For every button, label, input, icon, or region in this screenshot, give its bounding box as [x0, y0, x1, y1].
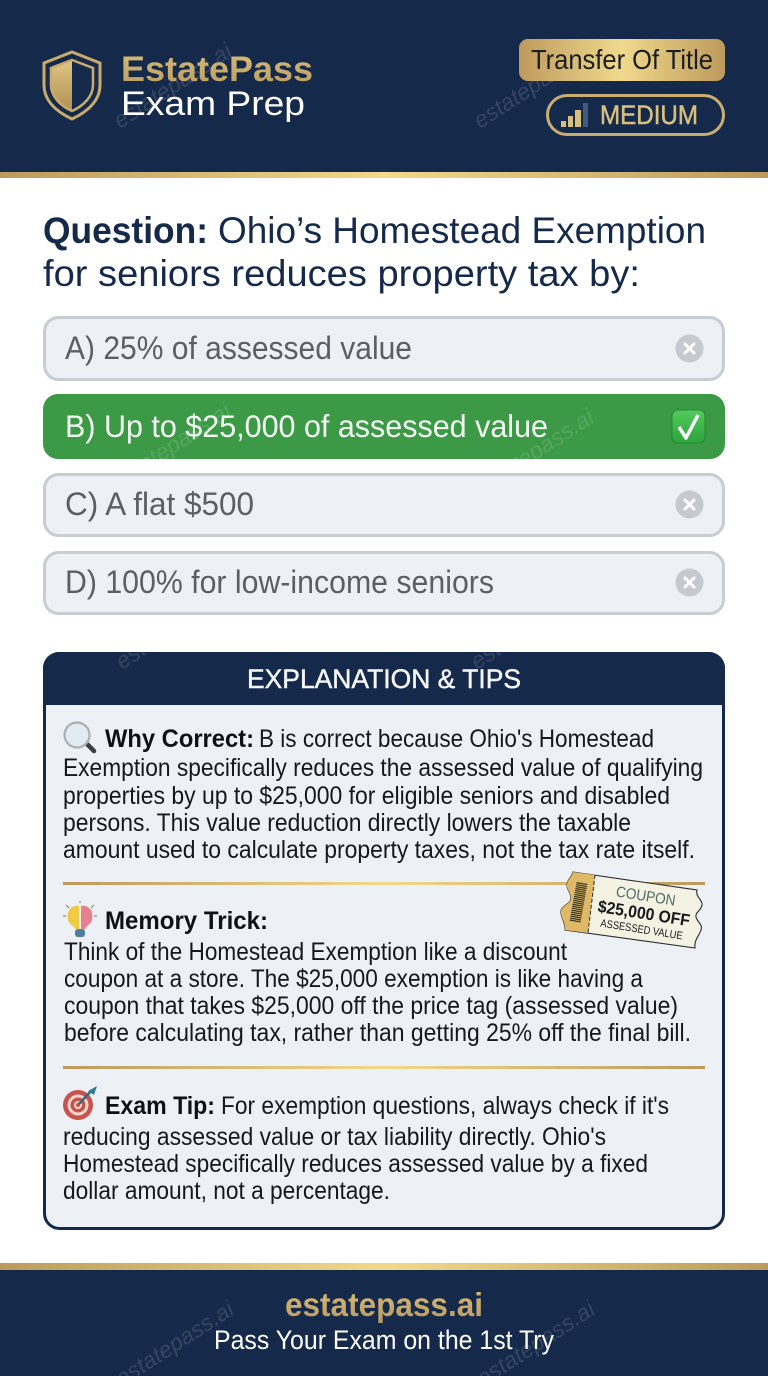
why correct text: Exemption specifically reduces the assessed value of qualifying	[63, 754, 703, 782]
option B correct: estatepass.ai	[108, 397, 236, 493]
why correct text: amount used to calculate property taxes, not the tax rate itself.	[63, 836, 695, 864]
difficulty badge: MEDIUM	[600, 100, 698, 130]
why correct text: properties by up to $25,000 for eligible seniors and disabled	[63, 782, 670, 810]
option D: D) 100% for low-income seniors	[65, 564, 494, 600]
footer watermarks	[111, 1295, 600, 1376]
option B correct: B) Up to $25,000 of assessed value	[65, 408, 548, 444]
footer url: estatepass.ai	[285, 1286, 483, 1323]
divider	[63, 882, 705, 885]
icon: magnifying glass	[64, 722, 94, 751]
option A	[44, 318, 724, 380]
option C	[44, 474, 724, 536]
footer tagline: Pass Your Exam on the 1st Try	[214, 1325, 554, 1355]
memory trick text: before calculating tax, rather than getting 25% off the final bill.	[64, 1019, 691, 1047]
panel heading: EXPLANATION & TIPS	[247, 664, 521, 694]
why correct text	[63, 725, 703, 864]
exam tip text: Homestead specifically reduces assessed value by a fixed	[63, 1150, 648, 1178]
why correct text: persons. This value reduction directly lowers the taxable	[63, 809, 631, 837]
icon: brain lightbulb	[63, 901, 97, 937]
memory trick text: coupon at a store. The $25,000 exemption is like having a	[64, 965, 643, 993]
footer band	[0, 1263, 768, 1376]
header watermarks: estatepass.ai	[109, 37, 237, 133]
header watermarks	[109, 37, 597, 133]
logo text: Exam Prep	[121, 85, 305, 123]
exam tip text: For exemption questions, always check if it's	[221, 1092, 669, 1120]
icon: coupon ticket: COUPON	[615, 883, 677, 910]
icon: coupon ticket: ASSESSED VALUE	[600, 918, 683, 942]
exam tip text: dollar amount, not a percentage.	[63, 1177, 390, 1205]
panel: explanation and tips: estatepass.ai	[111, 578, 239, 674]
logo text: EstatePass	[121, 50, 313, 89]
icon: coupon ticket: $25,000 OFF	[596, 897, 691, 930]
question heading	[43, 210, 706, 294]
option A: A) 25% of assessed value	[65, 330, 412, 366]
question heading: Question:	[43, 210, 208, 251]
icon: shield logo	[44, 52, 100, 119]
option B correct	[43, 394, 725, 459]
logo text	[121, 50, 313, 123]
header band	[0, 0, 768, 178]
topic badge: Transfer Of Title	[531, 44, 713, 75]
exam tip text	[63, 1092, 669, 1205]
question heading: Ohio’s Homestead Exemption	[218, 210, 706, 251]
exam tip text: Exam Tip:	[105, 1092, 215, 1120]
panel: explanation and tips: estatepass.ai	[466, 578, 594, 674]
panel: explanation and tips	[43, 652, 725, 1230]
memory trick text	[64, 907, 691, 1047]
divider	[63, 1066, 705, 1069]
memory trick text: coupon that takes $25,000 off the price tag (assessed value)	[64, 992, 678, 1020]
icon: coupon ticket	[561, 872, 702, 948]
option B correct: estatepass.ai	[471, 403, 599, 499]
icon: target with arrow	[63, 1086, 97, 1120]
option C: C) A flat $500	[65, 486, 254, 522]
memory trick text: Memory Trick:	[105, 907, 268, 935]
header watermarks: estatepass.ai	[469, 37, 597, 133]
why correct text: Why Correct:	[105, 725, 254, 753]
memory trick text: Think of the Homestead Exemption like a discount	[64, 938, 567, 966]
question heading: for seniors reduces property tax by:	[43, 253, 640, 294]
topic badge	[519, 39, 725, 81]
why correct text: B is correct because Ohio's Homestead	[259, 725, 654, 753]
difficulty badge	[548, 96, 724, 134]
exam tip text: reducing assessed value or tax liability directly. Ohio's	[63, 1123, 606, 1151]
option D	[44, 552, 724, 614]
